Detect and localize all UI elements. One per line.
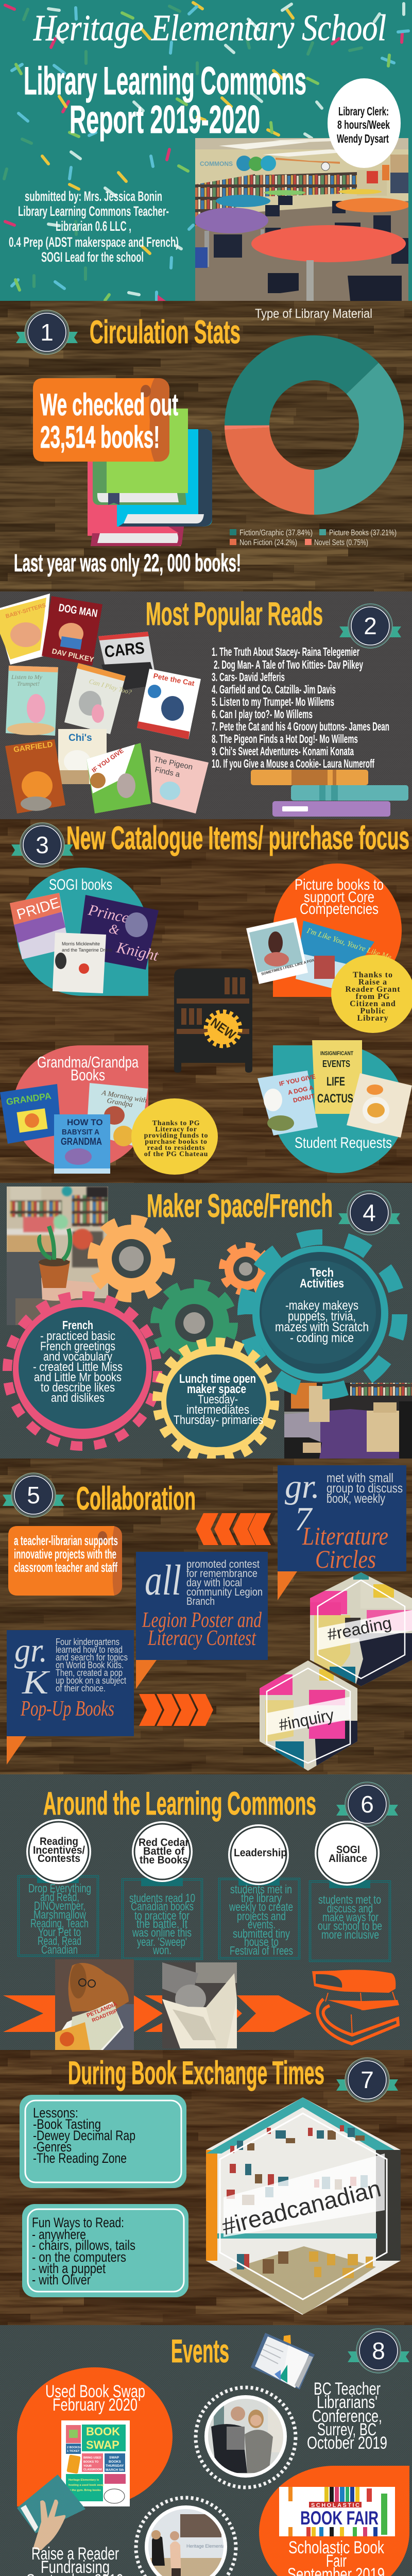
card: lessons: -The Reading Zone	[33, 2150, 127, 2166]
panel: used book swap: February 2020	[53, 2395, 138, 2415]
panel: student requests: A DOG A	[287, 1084, 314, 1096]
panel: kindergarten pop-up books: gr.	[14, 1632, 47, 1669]
card: leadership	[218, 1824, 300, 1959]
photo: #inquiry hexagon: #inquiry	[277, 1705, 335, 1734]
book covers: popular titles: DAV PILKEY	[51, 647, 95, 664]
panel: used book swap: MARCH 5th	[106, 2468, 124, 2472]
card: fun ways to read: Fun Ways to Read:	[32, 2215, 124, 2230]
card: SOGI alliance: Alliance	[329, 1853, 367, 1865]
text: BC teacher librarians conference	[307, 2379, 387, 2453]
callout: raise a reader grant thanks: Citizen and	[350, 999, 396, 1008]
text: last year comparison: Last year was only 22, 000 books!	[14, 550, 241, 577]
card: lessons	[20, 2095, 186, 2188]
book covers: popular titles: CARS	[104, 638, 145, 661]
panel: student requests: INSIGNIFICANT	[320, 1050, 353, 1057]
title: report name: Report 2019-2020	[70, 98, 260, 142]
panel: SOGI books: &	[108, 921, 121, 938]
panel: used book swap: Used Book Swap	[45, 2382, 145, 2401]
panel: tech activities gear: - coding mice	[290, 1331, 354, 1345]
icon: number badge 4: 4	[363, 1199, 376, 1226]
card: red cedar battle of the books: Red Cedar	[139, 1837, 189, 1849]
panel: used book swap: Heritage Elementary is	[68, 2479, 99, 2482]
panel: French gear: - practiced basic	[40, 1329, 115, 1343]
panel: used book swap: BOOKS	[109, 2460, 122, 2464]
icon: number badge 1: 1	[40, 319, 54, 346]
card: reading incentives: Reading	[40, 1836, 78, 1848]
panel: student requests: LIFE	[327, 1075, 345, 1089]
panel: tech activities gear: mazes with Scratch	[275, 1320, 369, 1334]
icon: orange book outlines	[312, 1970, 399, 2044]
panel: grandma and grandpa books: GRANDMA	[61, 1137, 102, 1147]
text block: submitted by: submitted by: Mrs. Jessica Bonin	[25, 189, 162, 204]
panel: kindergarten pop-up books: Pop-Up Books	[20, 1697, 114, 1721]
icon: number badge 5: 5	[27, 1482, 40, 1509]
book covers: popular titles: Listen to My	[11, 673, 43, 681]
panel: French gear: and dislikes	[51, 1391, 105, 1405]
icon: open book with bookmark	[251, 2333, 315, 2389]
panel: picture books for core competencies: Competencies	[300, 901, 379, 918]
panel: used book swap: 1 TICKET	[67, 2450, 80, 2453]
panel: kindergarten pop-up books: up book on a subject	[56, 1675, 126, 1686]
icon: number badge 4	[338, 1191, 400, 1235]
photo: conference circle	[196, 2387, 296, 2487]
panel: student requests: EVENTS	[322, 1059, 350, 1069]
icon: green gear	[155, 1284, 233, 1362]
panel: scholastic book fair: Fair	[326, 2551, 347, 2571]
card: reading incentives	[18, 1819, 99, 1957]
callout: raise a reader grant thanks: Public	[360, 1007, 386, 1015]
callout: raise a reader grant thanks: Library	[357, 1014, 389, 1023]
panel: during book exchange times	[0, 2050, 412, 2325]
panel: kindergarten pop-up books: learned how to read	[56, 1645, 123, 1655]
panel: kindergarten pop-up books: K	[22, 1664, 50, 1701]
panel: tech activities gear: Tech	[310, 1266, 334, 1280]
photo: dog reading: PETLANDIA	[86, 2001, 118, 2019]
callout: 23,514 books tag: 23,514 books!	[40, 420, 160, 454]
callout: PG Literacy thanks: providing funds to	[144, 1132, 208, 1140]
panel: French gear: - created Little Miss	[33, 1360, 123, 1374]
panel: hero header	[0, 0, 412, 301]
icon: number badge 8	[348, 2329, 409, 2373]
text: BC teacher librarians conference: BC Teacher	[314, 2379, 381, 2399]
panel: French gear: French greetings	[40, 1340, 115, 1353]
card: reading incentives: DINOvember,	[34, 1899, 85, 1912]
card: SOGI alliance: make ways for	[322, 1910, 379, 1924]
card: lessons: Lessons:	[33, 2105, 78, 2121]
icon: flat book stack	[251, 770, 408, 817]
callout: teacher-librarian tag: innovative projects with the	[14, 1546, 116, 1562]
panel: SOGI books: SOGI books	[49, 876, 112, 893]
card: SOGI alliance: our school to be	[318, 1919, 382, 1933]
card: SOGI alliance: more inclusive	[321, 1928, 379, 1941]
panel: French gear	[7, 1296, 158, 1446]
book covers: popular titles: Can I Play Too?	[88, 677, 133, 696]
card: reading incentives: Your Pet to	[38, 1925, 81, 1939]
panel: used book swap: SWAP	[86, 2438, 119, 2451]
text: BC teacher librarians conference: Librarians'	[317, 2393, 377, 2412]
photo: cat on open book	[162, 1962, 237, 2048]
callout: raise a reader grant thanks	[331, 955, 412, 1033]
icon: bookshelf with NEW badge	[174, 969, 252, 1073]
title: report name	[24, 59, 306, 142]
callout: teacher-librarian tag: classroom teacher and staff	[14, 1560, 117, 1575]
panel: used book swap: SWAP	[109, 2456, 119, 2460]
panel: SOGI books	[10, 868, 160, 996]
panel: kindergarten pop-up books: on World Book Kids.	[56, 1660, 124, 1670]
panel: grandma and grandpa books: BABYSIT A	[62, 1128, 99, 1137]
icon: number badge 6: 6	[360, 1791, 374, 1818]
panel: new catalogue items	[0, 819, 412, 1183]
icon: number badge 7	[336, 2058, 398, 2102]
arrow: orange chevrons pointing right	[139, 1694, 213, 1726]
card: leadership: submitted tiny	[233, 1927, 290, 1940]
photo: award circle	[136, 2498, 236, 2576]
card: red cedar battle of the books: students read 10	[129, 1891, 195, 1905]
callout: library clerk circle: 8 hours/Week	[337, 118, 390, 131]
panel: used book swap: in the gym. Bring books	[68, 2489, 101, 2492]
panel: grade 7 literature circles: gr.	[285, 1468, 320, 1505]
legend: Novel Sets (0.75%)	[314, 538, 368, 547]
panel: legion poster and literacy contest: day with local	[186, 1577, 242, 1589]
card: red cedar battle of the books: was online this	[132, 1926, 192, 1939]
panel: grandma and grandpa books: Grandma/Grandpa	[37, 1053, 139, 1071]
panel: SOGI books: and the Tangerine Dress	[62, 947, 112, 953]
icon: bookshelf with NEW badge: NEW	[208, 1015, 238, 1043]
panel: student requests: CACTUS	[317, 1092, 353, 1106]
icon: number badge 3: 3	[36, 832, 49, 858]
book covers: popular titles: Pete the Cat	[152, 671, 195, 687]
legend: Non Fiction (24.2%)	[239, 538, 297, 547]
panel: tech activities gear	[245, 1237, 400, 1392]
icon: number badge 2	[339, 604, 401, 648]
panel: legion poster and literacy contest: Legion Poster and	[142, 1608, 262, 1632]
text block: submitted by: Library Learning Commons Teacher-	[18, 204, 169, 219]
photo: dog reading	[55, 1959, 134, 2050]
panel: French gear: and vocabulary	[43, 1350, 112, 1364]
card: reading incentives: Incentives/	[33, 1844, 85, 1856]
card: leadership: Festival of Trees	[230, 1944, 293, 1957]
panel: tech activities gear: Activities	[300, 1277, 344, 1291]
icon: number badge 2: 2	[364, 613, 377, 639]
card: fun ways to read: - on the computers	[32, 2249, 126, 2265]
icon: peach gear	[93, 1220, 170, 1297]
panel: lunch time maker space gear	[157, 1342, 274, 1460]
panel: grade 7 literature circles	[278, 1465, 406, 1600]
panel: lunch time maker space gear: maker space	[187, 1382, 246, 1396]
photo: library room with coloured tables: COMMONS	[200, 160, 233, 167]
callout: teacher-librarian tag	[8, 1526, 122, 1596]
card: SOGI alliance: discuss and	[327, 1902, 373, 1915]
card: fun ways to read: - chairs, pillows, tails	[32, 2238, 135, 2253]
panel: picture books for core competencies	[246, 863, 402, 997]
panel: French gear: and Little Mr books	[34, 1370, 122, 1384]
panel: kindergarten pop-up books: Four kindergartens	[56, 1637, 119, 1647]
panel: scholastic book fair: BOOK FAIR	[300, 2507, 379, 2529]
card: fun ways to read	[22, 2204, 188, 2297]
card: SOGI alliance: students met to	[318, 1893, 381, 1906]
card: SOGI alliance	[309, 1821, 390, 1962]
text block: submitted by: Librarian 0.6 LLC ,	[56, 218, 131, 234]
panel: events	[0, 2325, 412, 2576]
photo: wooden block towers	[284, 1383, 412, 1459]
panel: legion poster and literacy contest: all	[145, 1556, 181, 1604]
card: red cedar battle of the books: year. 'Sweep'	[137, 1935, 187, 1948]
callout: raise a reader grant thanks: Thanks to	[353, 971, 393, 979]
card: reading incentives: Drop Everything	[28, 1882, 91, 1895]
panel: legion poster and literacy contest: promoted contest	[186, 1558, 260, 1570]
panel: most popular reads	[0, 591, 412, 819]
callout: PG Literacy thanks: read to residents	[147, 1144, 205, 1152]
panel: grandma and grandpa books	[0, 1045, 148, 1174]
callout: raise a reader grant thanks: from PG	[356, 992, 390, 1001]
card: lessons: -Dewey Decimal Rap	[33, 2128, 135, 2143]
panel: tech activities gear: -makey makeys	[285, 1298, 358, 1313]
panel: lunch time maker space gear: Lunch time open	[179, 1372, 256, 1386]
panel: picture books for core competencies: Picture books to	[295, 876, 384, 893]
photo: #inquiry hexagon	[260, 1660, 357, 1771]
book covers: popular titles: BABY-SITTERS	[5, 602, 46, 620]
panel: student requests	[258, 1040, 412, 1173]
callout: 23,514 books tag: We checked out	[40, 387, 178, 422]
panel: used book swap: hosting a used book swap	[68, 2484, 104, 2487]
panel: SOGI books: Prince	[87, 901, 131, 926]
book covers: popular titles: GARFIELD	[13, 740, 54, 754]
panel: grade 7 literature circles: book, weekly	[327, 1492, 385, 1506]
panel: scholastic book fair: Scholastic Book	[288, 2538, 385, 2557]
panel: used book swap: CLASSROOM	[83, 2468, 102, 2471]
panel: lunch time maker space gear: Tuesday-	[198, 1393, 238, 1406]
heading: collaboration: Collaboration	[76, 1481, 196, 1517]
chart title: Type of Library Material	[255, 307, 372, 321]
card: leadership: weekly to create	[229, 1900, 293, 1913]
heading: events: Events	[171, 2333, 229, 2369]
panel: circulation stats	[0, 301, 412, 591]
text block: top ten list: 5. Listen to my Trumpet- Mo Willems	[212, 695, 334, 708]
card: red cedar battle of the books: the Books	[140, 1854, 188, 1866]
card: leadership: projects and	[237, 1909, 286, 1923]
panel: grade 7 literature circles: 7	[295, 1500, 313, 1538]
text: BC teacher librarians conference: Surrey, BC	[317, 2420, 376, 2439]
legend	[230, 529, 397, 547]
panel: used book swap: BRING USED	[83, 2456, 101, 2460]
panel: kindergarten pop-up books: of their choice.	[56, 1683, 106, 1693]
donut chart: type of library material	[225, 335, 404, 515]
card: leadership: the library	[241, 1891, 282, 1905]
card: fun ways to read: - with a puppet	[32, 2261, 106, 2276]
card: lessons: -Genres	[33, 2139, 72, 2155]
icon: number badge 6	[336, 1782, 398, 1826]
card: red cedar battle of the books: Battle of	[143, 1845, 185, 1857]
book covers: popular titles: IF YOU GIVE	[91, 747, 125, 774]
panel: maker space and French	[0, 1183, 412, 1460]
panel: grandma and grandpa books: Books	[71, 1066, 105, 1084]
panel: French gear: to describe likes	[41, 1381, 115, 1395]
card: SOGI alliance: SOGI	[336, 1844, 360, 1856]
text block: top ten list: 3. Cars- David Jefferis	[212, 670, 285, 684]
panel: picture books for core competencies: I'm Like You, You're Like Me	[305, 926, 392, 962]
text: BC teacher librarians conference: Conference,	[312, 2406, 382, 2426]
panel: grandma and grandpa books: A Morning with	[100, 1089, 147, 1105]
panel: used book swap: THURSDAY	[106, 2464, 124, 2468]
card: red cedar battle of the books: to practice for	[134, 1909, 190, 1922]
card: red cedar battle of the books: the battle. It	[136, 1917, 187, 1930]
callout: PG Literacy thanks	[131, 1098, 218, 1175]
card: leadership: events.	[248, 1918, 276, 1931]
panel: grandma and grandpa books: HOW TO	[67, 1117, 103, 1127]
panel: around the learning commons	[0, 1774, 412, 2050]
icon: stack of books	[88, 409, 212, 546]
callout: 23,514 books tag	[33, 378, 178, 462]
panel: used book swap	[17, 2367, 173, 2506]
icon: number badge 1	[16, 310, 78, 354]
icon: number badge 7: 7	[360, 2066, 374, 2093]
callout: raise a reader grant thanks: Reader Grant	[345, 985, 401, 994]
callout: PG Literacy thanks: of the PG Chateau	[144, 1150, 208, 1158]
panel: used book swap: BOOK	[86, 2425, 120, 2438]
photo: #reading hexagon	[310, 1572, 412, 1686]
text: raise a reader: Raise a Reader	[31, 2544, 119, 2564]
text block: top ten list	[212, 645, 389, 770]
panel: used book swap: YOUR	[83, 2465, 92, 2468]
photo: #reading hexagon: #reading	[326, 1614, 393, 1644]
photo: #ireadcanadian hexagon	[206, 2097, 401, 2315]
panel: used book swap: BOOKS TO	[83, 2461, 99, 2464]
text block: submitted by	[9, 189, 179, 265]
panel: SOGI books: Knight	[115, 939, 160, 964]
text block: submitted by: SOGI Lead for the school	[41, 249, 144, 265]
callout: raise a reader grant thanks: Raise a	[358, 978, 387, 987]
arrow: orange chevron band	[3, 1995, 312, 2032]
panel: tech activities gear: puppets, trivia,	[288, 1309, 356, 1324]
panel: SOGI books: PRIDE	[15, 894, 62, 923]
panel: student requests: DONUT	[293, 1092, 316, 1104]
legend: Fiction/Graphic (37.84%)	[239, 529, 313, 537]
panel: lunch time maker space gear: Thursday- primaries	[174, 1413, 263, 1427]
panel: kindergarten pop-up books: and search for topics	[56, 1652, 128, 1663]
text: BC teacher librarians conference: October 2019	[307, 2433, 387, 2453]
panel: legion poster and literacy contest: community Legion	[186, 1586, 263, 1598]
card: reading incentives: Reading, Teach	[30, 1917, 89, 1930]
panel: picture books for core competencies: support Core	[304, 889, 374, 906]
photo: award circle: Heritage Elementary	[186, 2544, 229, 2549]
panel: kindergarten pop-up books: Then, created a pop	[56, 1668, 123, 1678]
panel: scholastic book fair	[259, 2466, 409, 2576]
book covers: popular titles: Finds a	[154, 765, 181, 779]
panel: French gear: French	[62, 1318, 93, 1332]
text block: submitted by: 0.4 Prep (ADST makerspace and French)	[9, 234, 179, 250]
panel: grade 7 literature circles: Literature	[302, 1521, 388, 1550]
panel: used book swap: 2 BOOKS=	[67, 2446, 81, 2449]
card: leadership: students met in	[230, 1883, 292, 1896]
panel: legion poster and literacy contest	[136, 1552, 268, 1689]
card: lessons: -Book Tasting	[33, 2116, 101, 2132]
panel: student requests: IF YOU GIVE	[279, 1073, 316, 1088]
panel: collaboration	[0, 1459, 412, 1774]
text block: top ten list: 6. Can I play too?- Mo Willems	[212, 707, 313, 721]
panel: picture books for core competencies: SOMETIMES I FEEL LIKE A FOX	[261, 959, 315, 976]
panel: scholastic book fair: SCHOLASTIC	[311, 2502, 359, 2509]
card: leadership: Leadership	[234, 1847, 287, 1859]
panel: SOGI books: Morris Micklewhite	[62, 941, 100, 946]
icon: number badge 8: 8	[372, 2337, 385, 2364]
icon: number badge 5	[3, 1473, 64, 1517]
card: fun ways to read: - anywhere	[32, 2227, 86, 2242]
card: reading incentives: Contests	[38, 1853, 80, 1865]
card: fun ways to read: - with Oliver	[32, 2272, 91, 2287]
icon: small orange gear	[222, 1245, 269, 1293]
callout: PG Literacy thanks: purchase books to	[145, 1138, 208, 1146]
panel: legion poster and literacy contest: Literacy Contest	[147, 1626, 256, 1650]
photo: dog reading: ROADTRIP	[91, 2008, 118, 2024]
panel: grade 7 literature circles: Circles	[315, 1545, 376, 1573]
book covers: popular titles	[0, 594, 209, 814]
card: reading incentives: Read, Read	[38, 1934, 81, 1947]
book covers: popular titles: DOG MAN	[58, 602, 98, 620]
card: reading incentives: and Read,	[40, 1890, 79, 1904]
callout: PG Literacy thanks: Literacy for	[155, 1126, 197, 1133]
callout: library clerk circle	[328, 78, 401, 168]
card: red cedar battle of the books: won.	[152, 1943, 171, 1957]
card: reading incentives: Canadian	[41, 1943, 78, 1956]
icon: number badge 3	[11, 823, 73, 867]
card: reading incentives: Marshmallow	[33, 1908, 86, 1921]
text: raise a reader	[26, 2544, 124, 2576]
arrow: orange chevrons pointing left	[196, 1513, 276, 1545]
callout: PG Literacy thanks: Thanks to PG	[152, 1120, 200, 1127]
card: red cedar battle of the books: Canadian books	[131, 1900, 194, 1913]
card: leadership: house to	[244, 1935, 279, 1948]
panel: legion poster and literacy contest: Branch	[186, 1596, 215, 1607]
card: red cedar battle of the books	[122, 1821, 203, 1960]
panel: grandma and grandpa books: GRANDPA	[6, 1091, 52, 1107]
panel: grade 7 literature circles: met with small	[327, 1471, 393, 1485]
photo: cactus craft in hand	[7, 1186, 108, 1325]
photo: #ireadcanadian hexagon: #ireadcanadian	[219, 2175, 384, 2240]
panel: lunch time maker space gear: intermediates	[186, 1403, 249, 1417]
book covers: popular titles: Trumpet!	[17, 680, 40, 687]
heading: circulation stats: Circulation Stats	[90, 314, 241, 350]
panel: kindergarten pop-up books	[7, 1630, 134, 1765]
book covers: popular titles: The Pigeon	[153, 755, 194, 772]
icon: hand on book	[17, 2475, 85, 2550]
book covers: popular titles: Chi's	[68, 733, 92, 743]
panel: legion poster and literacy contest: for remembrance	[186, 1568, 258, 1580]
panel: grandma and grandpa books: Grandpa	[106, 1097, 133, 1109]
callout: teacher-librarian tag: a teacher-librarian supports	[14, 1533, 118, 1548]
photo: library room with coloured tables	[194, 138, 410, 301]
